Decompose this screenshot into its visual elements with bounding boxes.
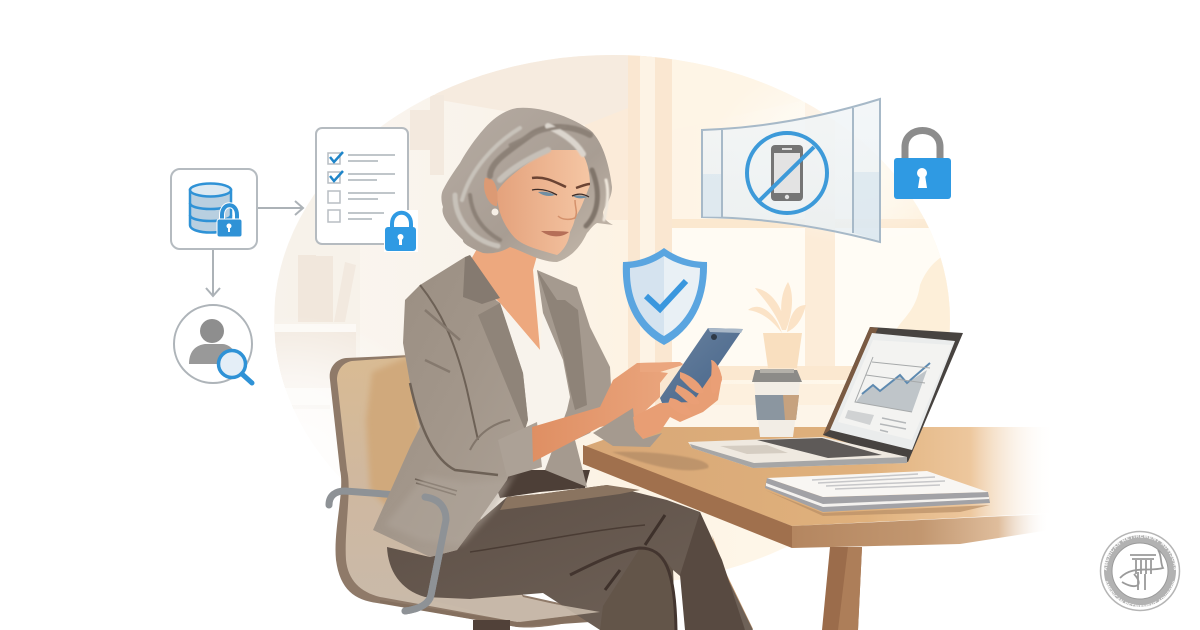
database [190, 184, 231, 232]
blazer [373, 255, 612, 557]
logo badge: AMERICAN RETIREMENT ADVISORS [1104, 535, 1176, 570]
neck and chest [465, 240, 540, 350]
facial features [484, 178, 590, 236]
face [497, 150, 590, 255]
logo badge [1100, 530, 1180, 612]
icon: large padlock [894, 130, 951, 199]
checklist document [316, 128, 418, 252]
left cuff [498, 422, 542, 477]
arrow to checklist [258, 201, 303, 215]
plant [748, 282, 806, 368]
table leg far (diagonal) [712, 535, 753, 629]
table [583, 427, 1055, 630]
logo badge: AMERICAN RETIREMENT ADVISORS [1106, 581, 1174, 607]
translucent privacy panel [702, 99, 880, 242]
laptop [688, 327, 963, 468]
column emblem [1120, 550, 1163, 590]
laptop chart [845, 357, 930, 432]
chair seat front [430, 598, 600, 622]
chair armrest [329, 491, 446, 611]
ear and earring [484, 178, 498, 206]
fingers [668, 360, 722, 415]
white blouse [500, 303, 570, 470]
pointing finger [640, 362, 683, 372]
right jacket cuff [593, 408, 662, 447]
table leg near [822, 547, 862, 630]
trousers [387, 470, 753, 630]
icon: user search [174, 305, 252, 383]
forearm and pointing hand [532, 362, 683, 462]
shield icon [623, 248, 707, 345]
hair highlights [455, 126, 608, 246]
paper stack [765, 471, 990, 516]
coffee cup [752, 369, 802, 437]
checklist padlock [384, 210, 418, 252]
armrest post in front of blazer [405, 497, 446, 611]
arrow to user [206, 250, 220, 296]
icon: database with lock panel [171, 169, 257, 249]
phone and gripping hand [633, 328, 743, 439]
background room circle [274, 55, 950, 580]
icon: no phone [747, 133, 827, 213]
hair back [441, 108, 613, 262]
small padlock [217, 205, 242, 237]
office chair [330, 355, 600, 630]
